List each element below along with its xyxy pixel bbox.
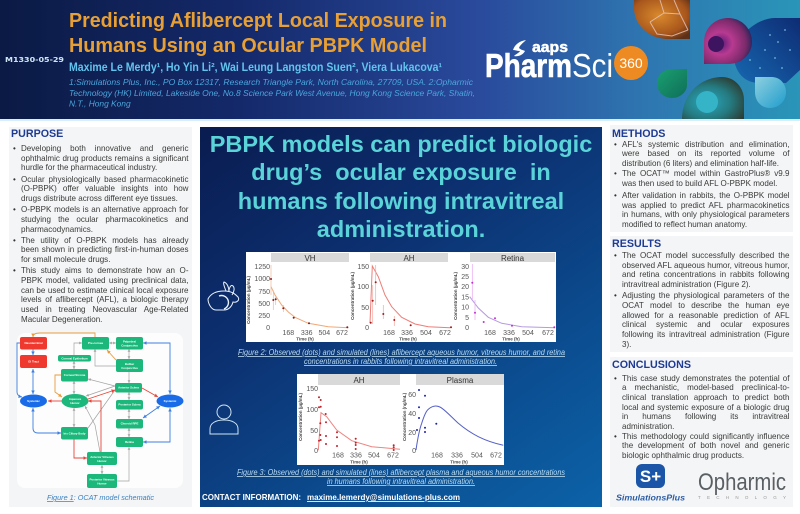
headline: administration. [317,216,485,242]
conference logo: aaps [532,39,568,56]
chart: human AH: 100 [306,407,318,414]
panel: methods [610,125,793,232]
headline: humans following intravitreal [238,188,564,214]
panel: central message and figures [200,127,602,507]
text block: purpose bullets: • [13,175,16,184]
text block: purpose bullets: Developing both innovative and generic [21,144,188,153]
caption: figure 3 [237,468,565,486]
panel: results [610,236,793,352]
chart: AH: 168 [383,330,395,337]
chart: human plasma: 504 [471,452,483,460]
text block: purpose bullets [13,144,188,324]
chart: Retina: 25 [461,274,469,281]
text block: conclusions bullets: administration. [622,422,674,431]
heading: results: RESULTS [612,238,661,250]
panel: purpose [9,127,192,507]
chart: human AH: 150 [306,386,318,393]
conference logo [485,39,648,84]
chart: human plasma: 0 [412,448,416,455]
text block: results bullets: 3). [622,340,631,349]
text block: results bullets: Adjusting the physiological parameters of the [622,291,790,300]
text block: purpose bullets: pharmacodynamics. [21,225,93,234]
affiliations [69,77,475,108]
chart: human AH [298,374,400,464]
chart: VH: Concentration (µg/mL) [246,275,251,324]
chart: human AH: Concentration (µg/mL) [298,392,303,441]
affiliations: Technology (HK) Limited, Lakeside One, No.8 Science Park West Avenue, Hong Kong Science Park, Shatin, [69,88,475,98]
figure 1: OCAT model schematic: Humor [97,482,108,486]
figure 1: OCAT model schematic: Nasolacrimal [24,341,43,345]
figure 1: OCAT model schematic: Pre-cornea [88,341,103,345]
chart: Retina: 30 [461,264,469,271]
conference logo: Pharm [485,47,572,84]
figure 1: OCAT model schematic: Anterior Vitreous [90,455,114,459]
figure 1: OCAT model schematic: Aqueous [69,397,82,401]
figure 1: OCAT model schematic: Systemic [27,399,40,403]
figure 1: OCAT model schematic: Iris Ciliary Body [63,432,86,436]
text block: methods bullets: • [614,191,617,200]
text block: methods bullets: AFL's systemic distribution and elimination, [622,140,790,149]
text block: methods bullets: were based on its reported volume of [622,149,790,158]
chart: AH: Time (h) [399,336,417,342]
chart: human AH: Time (h) [350,460,368,464]
text block: purpose bullets: • [13,144,16,153]
chart: human AH: 168 [332,452,344,460]
text block: conclusions bullets: • [614,432,617,441]
text block: purpose bullets: The utility of O-PBPK models has already [21,236,188,245]
chart: VH: 336 [301,330,313,337]
caption: figure 3: in humans following intravitreal administration. [327,477,475,486]
figure 1: OCAT model schematic: Corneal Epithelium [61,356,88,360]
chart: Retina: Concentration (µg/mL) [453,271,458,320]
conference logo: Sci [572,47,613,84]
text block: methods bullets: • [614,140,617,149]
text block: results bullets [614,251,790,349]
text block: results bullets: following its intravitreal administration (Figure [622,330,790,339]
text block: conclusions bullets: This methodology could significantly influence [622,432,790,441]
chart: VH: VH [304,254,316,263]
caption: figure 2: Figure 2: Observed (dots) and simulated (lines) aflibercept aqueous humor, vitreous humor, and retina [238,348,565,357]
logo: Simulations Plus [616,464,685,503]
headline: PBPK models can predict biologic [210,131,592,157]
chart: human plasma: 336 [451,452,463,460]
caption: figure 3: Figure 3: Observed (dots) and simulated (lines) aflibercept plasma and aqueous humor concentrations [237,468,565,477]
text block: methods bullets: was applied to predict AFL pharmacokinetics [622,201,790,210]
heading: conclusions: CONCLUSIONS [612,359,691,371]
chart: Retina [453,253,555,342]
chart: human plasma: 168 [431,452,443,460]
chart: Retina: Time (h) [502,336,520,342]
text block: purpose bullets: can be used to estimate clinical local exposure [21,286,188,295]
chart: AH: AH [403,254,415,263]
chart: AH: 0 [365,325,369,332]
chart: human plasma [402,374,504,464]
chart: VH: 504 [318,330,330,337]
chart: Retina: 672 [542,330,554,337]
text block: purpose bullets: (O-PBPK) offer valuable insights into how [21,184,188,193]
text block: methods bullets: distribution (6 liters) and elimination half-life. [622,159,779,168]
text block: purpose bullets: • [13,266,16,275]
text block: purpose bullets: • [13,236,16,245]
chart: VH: 500 [258,301,270,308]
logo: Opharmic Technology: Opharmic [698,469,786,496]
chart: human AH: 672 [387,452,399,460]
text block: results bullets: intravitreal administration (Figure 2). [622,280,751,289]
chart: Retina: 10 [461,304,469,312]
figure 1: OCAT model schematic: Conjunctiva [121,344,138,348]
text block: results bullets: observed AFL aqueous humor, vitreous humor, [622,261,790,270]
chart: VH [246,253,349,342]
text block: purpose bullets: • [13,205,16,214]
contact information [202,492,460,502]
text block: conclusions bullets: the development of both novel and generic [622,441,790,450]
chart: human AH: 0 [314,448,318,455]
logo: Simulations Plus: S+ [640,467,661,486]
chart: AH: 504 [420,330,432,337]
chart: Retina: 0 [465,325,469,332]
figure 1: OCAT model schematic: Systemic [164,399,177,403]
chart: human plasma: Time (h) [450,460,468,464]
figure 1: OCAT model schematic: Palpebral [123,340,136,344]
headline: drug’s ocular exposure in [251,159,551,185]
contact information: maxime.lemerdy@simulations-plus.com [307,492,460,502]
text block: conclusions bullets: biologic ophthalmic drug products. [622,451,744,460]
text block: conclusions bullets: local and systemic exposure of a biologic drug [622,403,790,412]
chart: VH: 250 [258,313,270,320]
chart: human plasma: 40 [408,411,416,418]
chart: human AH: 504 [368,452,380,460]
chart: human plasma: Concentration (ng/mL) [402,392,407,441]
contact information: CONTACT INFORMATION: [202,492,301,502]
text block: conclusions bullets: a mechanistic, model-based preclinical-to- [622,383,790,392]
chart: VH: 750 [258,289,270,296]
text block: purpose bullets: drugs distribute across different eye tissues. [21,194,178,203]
caption: figure 2 [238,348,565,366]
text block: results bullets: allowed for a reasonable prediction of AFL [622,311,790,320]
text block: methods bullets: • [614,169,617,178]
text block: conclusions bullets: This case study demonstrates the potential of [622,374,790,383]
chart: AH: 100 [357,284,369,291]
chart: AH: 150 [357,264,369,271]
chart: human AH: 336 [350,452,362,460]
text block: conclusions bullets [614,374,790,460]
figure 3: human concentration charts [297,374,504,465]
text block: methods bullets: After validation in rabbits, the O-PBPK model [622,191,790,200]
header banner [0,0,800,121]
text block: results bullets: The OCAT model successfully described the [622,251,790,260]
headline [210,131,592,242]
title: Predicting Aflibercept Local Exposure in [69,9,447,32]
chart: Retina: 15 [461,294,469,302]
affiliations: 1:Simulations Plus, Inc., PO Box 12317, Research Triangle Park, North Carolina, 27709, USA. 2:Opharmic [69,77,474,87]
text block: purpose bullets: This study aims to demonstrate how an O- [21,266,188,275]
text block: results bullets: OCAT model to describe the human eye [622,301,790,310]
chart: VH: Time (h) [296,336,314,342]
figure 1: OCAT model schematic: Figure 1: OCAT model schematic [47,493,154,502]
text block: purpose bullets: studying the ocular pharmacokinetics and [21,215,188,224]
text block: purpose bullets: for small molecule drugs. [21,255,110,264]
icon: person [210,405,238,434]
text block: methods bullets: modified to reflect human anatomy. [622,220,747,229]
chart: VH: 0 [266,325,270,332]
text block: methods bullets: in humans, with only physiological parameters [622,210,790,219]
figure 1: OCAT model schematic: Posterior Vitreous [89,478,115,482]
chart: AH: 50 [361,305,369,312]
chart: human plasma: 60 [408,392,416,399]
chart: Retina: 5 [465,315,469,322]
text block: purpose bullets: ophthalmic drug products remains a significant [21,154,188,163]
poster id: M1330-05-29 [5,55,64,64]
chart: Retina: 20 [461,284,469,291]
text block: methods bullets: was then used to build AFL O-PBPK model. [622,179,777,188]
figure 1: OCAT model schematic: Conjunctiva [121,366,138,370]
chart: human AH: 50 [310,428,318,435]
text block: purpose bullets: Ocular physiologically based pharmacokinetic [21,175,188,184]
chart: AH: 336 [401,330,413,337]
text block: purpose bullets: been shown in predicting first-in-human doses [21,245,188,254]
chart: AH: 672 [439,330,451,337]
conference logo: 360 [619,55,643,71]
authors: Maxime Le Merdy¹, Ho Yin Li², Wai Leung Langston Suen², Viera Lukacova¹ [69,62,442,74]
figure 1: OCAT model schematic: Choroid RPE [121,422,138,426]
text block: purpose bullets: PBPK model, validated using preclinical data, [21,276,188,285]
chart: human plasma: 20 [408,430,416,437]
chart: human plasma: 672 [490,452,502,460]
text block: conclusions bullets: clinical translation approach to predict both [622,393,790,402]
figure 1: OCAT model schematic: Bulbar [125,362,135,366]
logo: Opharmic Technology: TECHNOLOGY [698,495,786,500]
text block: purpose bullets: Macular Degeneration. [21,315,102,324]
affiliations: N.T., Hong Kong [69,98,131,108]
logo: Simulations Plus: SimulationsPlus [616,493,685,503]
chart: Retina: 336 [503,330,515,337]
figure 1: OCAT model schematic: Corneal Stroma [64,373,86,377]
heading: methods: METHODS [612,128,665,140]
decorative photo blobs [634,0,800,119]
chart: Retina: 168 [484,330,496,337]
text block: methods bullets: The OCAT™ model within GastroPlus® v9.9 [622,169,790,178]
text block: methods bullets [614,140,790,229]
panel: conclusions [610,357,793,507]
text block: results bullets: • [614,251,617,260]
icon: rabbit [208,282,239,310]
text block: conclusions bullets: in humans following its intravitreal [622,412,790,421]
chart: AH: Concentration (µg/mL) [350,271,355,320]
chart: AH [350,253,452,342]
text block: results bullets: clinical systemic and ocular exposures [622,320,790,329]
chart: human AH: AH [353,376,365,385]
figure 1: OCAT model schematic: GI Tract [28,360,39,364]
text block: purpose bullets: used in treating Neovascular Age-Related [21,305,188,314]
chart: VH: 1000 [254,276,270,283]
text block: results bullets: • [614,291,617,300]
title: Humans Using an Ocular PBPK Model [69,34,427,57]
chart: VH: 672 [336,330,348,337]
text block: conclusions bullets: • [614,374,617,383]
chart: VH: 168 [282,330,294,337]
heading: purpose: PURPOSE [11,128,63,140]
figure 1: OCAT model schematic: Posterior Sclera [118,402,141,406]
text block: purpose bullets: O-PBPK models is an alternative approach for [21,205,188,214]
figure 1: OCAT model schematic: Humor [70,401,81,405]
figure 1: OCAT model schematic: Anterior Sclera [118,386,139,390]
chart: human plasma: Plasma [447,376,474,385]
chart: Retina: 504 [522,330,534,337]
figure 1: OCAT model schematic: Retina [125,440,134,444]
figure 1: OCAT model schematic: Humor [97,459,108,463]
text block: results bullets: and retina concentrations in rabbits following [622,270,790,279]
text block: purpose bullets: levels of aflibercept (AFL), a biologic therapy [21,295,188,304]
chart: VH: 1250 [254,264,270,271]
title [69,9,447,57]
chart: Retina: Retina [501,254,525,263]
text block: purpose bullets: hurdle for the pharmaceutical industry. [21,163,157,172]
caption: figure 2: concentrations in rabbits following intravitreal administration. [304,357,497,366]
